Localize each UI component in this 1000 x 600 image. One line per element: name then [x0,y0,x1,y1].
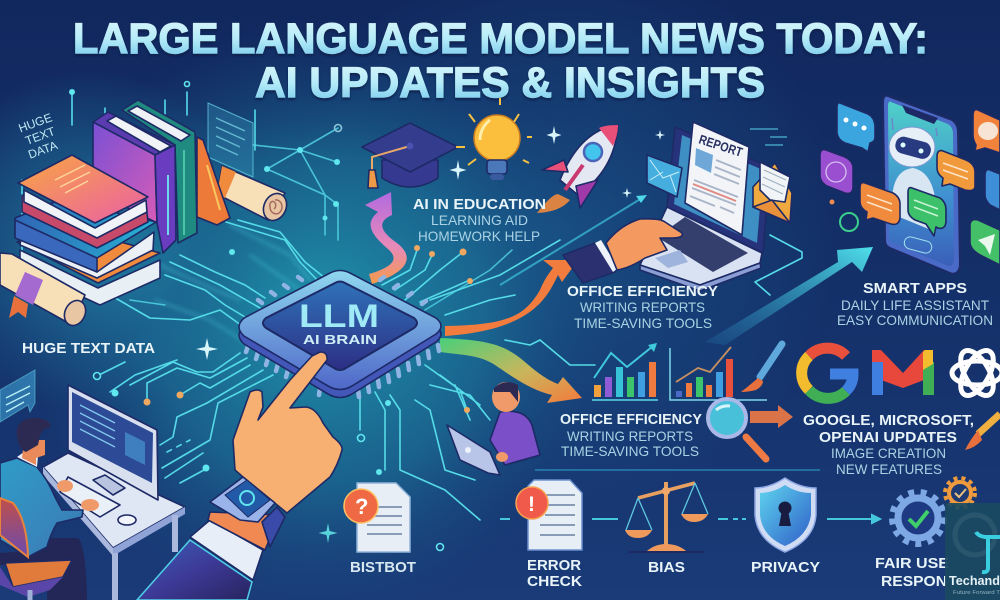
robot [889,118,938,232]
label: privacy: PRIVACY [751,559,820,576]
icon: phone with robot [820,96,1000,274]
label: fair use response: FAIR USE [875,555,949,572]
desk [43,453,185,548]
chip text: LLM [299,298,379,334]
label: smart apps [837,280,993,328]
label: office efficiency lower: OFFICE EFFICIENCY [560,411,702,428]
arrow: orange small [750,405,793,428]
book: blue middle [15,200,156,278]
label: office efficiency lower: WRITING REPORTS [567,428,693,444]
label: fair use response: RESPON [881,573,947,590]
arrow: orange [445,260,578,336]
icon: error check document [516,480,582,550]
label: office efficiency top: TIME-SAVING TOOLS [574,315,712,331]
chip text [299,298,379,347]
icon: gmail m [872,350,934,395]
rotated label: huge text data: DATA [26,138,59,162]
icon: paint brush [741,344,782,392]
label: office efficiency top: WRITING REPORTS [580,299,705,315]
icon: shield [755,478,816,552]
chart: axes and bars [670,347,767,400]
arrow: thin cyan to laptop [500,195,647,285]
icon: gear check [892,492,944,544]
person at desk [0,385,185,600]
title: LARGE LANGUAGE MODEL NEWS TODAY: [73,15,928,63]
icon: scales [625,482,708,552]
label: office efficiency top: OFFICE EFFICIENCY [567,283,718,300]
label: google microsoft openai updates: IMAGE CREATION [831,445,946,461]
monitor [68,385,158,500]
email icon [647,155,682,197]
chip pins [246,277,439,397]
smart watch [210,477,285,547]
label: google microsoft openai updates: OPENAI UPDATES [819,429,957,446]
icon: pointing hand [137,352,342,600]
label: ai in education [413,196,546,244]
label: smart apps: SMART APPS [863,280,967,297]
label: smart apps: EASY COMMUNICATION [837,312,993,328]
report sheet [685,122,749,235]
book: green upright [122,100,197,243]
icon: error check document: ! [528,493,535,516]
chair [0,498,28,557]
label: google microsoft openai updates: NEW FEATURES [836,461,942,477]
label: error check [527,557,582,590]
hand on keyboard [563,219,682,283]
title [73,15,928,107]
person with laptop [447,382,540,475]
hands [57,480,99,511]
nodes [69,89,391,475]
icon: graduation cap [362,123,458,188]
label: bistbot: BISTBOT [350,559,416,576]
icon: scroll right [217,166,291,224]
rotated label: huge text data: TEXT [23,124,58,148]
label: office efficiency lower: TIME-SAVING TOOLS [561,443,699,459]
orange envelope with paper [753,162,792,223]
icon: laptop with report [563,122,792,291]
chip: llm ai brain [239,270,441,398]
arrow: purple up [365,192,407,284]
icon: chat bubble left [0,370,35,422]
torso [0,458,83,557]
label: ai in education: AI IN EDUCATION [413,196,546,213]
watermark: techand logo [945,503,1000,600]
keyboard [60,477,120,517]
label: fair use response [875,555,949,590]
icon: bistbot document: ? [355,494,368,519]
label: google microsoft openai updates [803,412,974,477]
chat bubbles [820,103,1000,265]
book: orange top [18,155,148,248]
arrow: large cyan [705,247,873,345]
watermark: techand logo: Techand [949,573,1000,588]
arrow: rainbow [440,338,582,403]
label: error check: ERROR [527,557,581,574]
icon: light bulb [456,98,532,180]
icon: paint brush right [965,414,1000,450]
book: orange leaning [197,137,230,225]
label: office efficiency top [567,283,718,331]
floating document [208,103,253,177]
connector dashes [500,515,880,523]
label: ai in education: HOMEWORK HELP [418,228,540,244]
rotated label: huge text data: HUGE [17,110,54,135]
icon: books [15,100,230,305]
icon: openai knot [952,345,1000,401]
book: purple upright [93,112,176,253]
icon: scroll left [0,253,90,329]
label: ai in education: LEARNING AID [431,212,528,228]
circuit lines [22,82,802,550]
legs [0,538,87,600]
label: huge text data: HUGE TEXT DATA [22,340,155,357]
head [22,440,45,465]
label: office efficiency lower [560,411,702,459]
icon: bistbot document [344,483,410,552]
book: orange bottom [17,225,160,305]
chart: rising bars [592,343,658,400]
rotated label: huge text data [17,110,64,162]
label: error check: CHECK [527,573,582,590]
bottom divider [535,469,820,471]
icon: small gear [945,478,975,508]
report sheet: REPORT [697,132,745,160]
chip text: AI BRAIN [303,332,377,347]
label: smart apps: DAILY LIFE ASSISTANT [841,297,989,313]
icon: magnifier [708,399,766,459]
icon: rocket [537,125,618,213]
title: AI UPDATES & INSIGHTS [255,59,765,107]
watermark: techand logo: Future Forward T [953,590,1000,596]
label: google microsoft openai updates: GOOGLE, MICROSOFT, [803,412,974,429]
icon: google g [802,348,853,398]
label: bias: BIAS [648,559,685,576]
